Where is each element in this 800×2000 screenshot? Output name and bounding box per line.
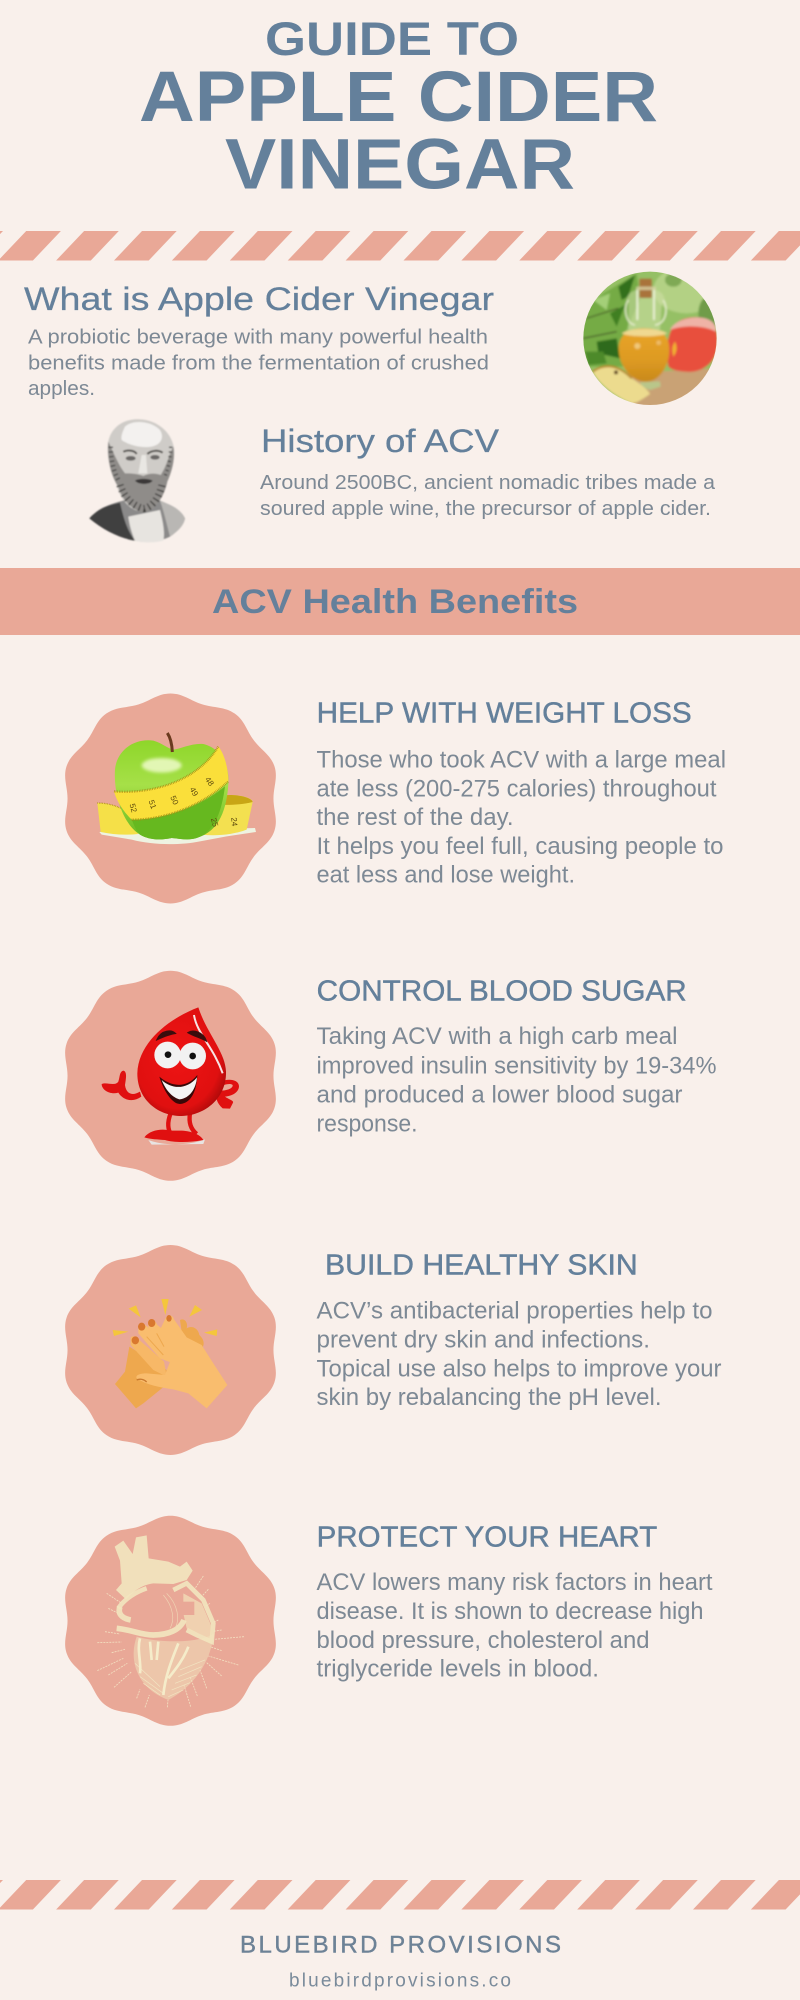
text block: healthy skin description: Topical use also helps to improve your	[316, 1355, 722, 1382]
text block: blood sugar description: and produced a lower blood sugar	[316, 1081, 683, 1108]
title: GUIDE TO	[265, 12, 519, 65]
badge: blood sugar	[65, 971, 276, 1181]
text block: history description: Around 2500BC, ancient nomadic tribes made a	[260, 472, 716, 494]
text block: history description: soured apple wine, the precursor of apple cider.	[260, 498, 711, 520]
text block: healthy skin description: prevent dry skin and infections.	[316, 1326, 650, 1353]
icon: green apple with measuring tape: 50	[168, 794, 180, 807]
text block: heart description	[316, 1569, 713, 1683]
text block: blood sugar description	[316, 1023, 716, 1137]
banner: ACV health benefits: ACV Health Benefits	[212, 583, 578, 621]
icon: green apple with measuring tape: 51	[147, 799, 158, 811]
panel: history of ACV	[260, 423, 716, 520]
text block: what is ACV description	[28, 326, 489, 400]
heading: history of ACV: History of ACV	[261, 423, 500, 459]
text block: heart description: ACV lowers many risk factors in heart	[316, 1569, 713, 1596]
icon: green apple with measuring tape: 48	[203, 775, 216, 788]
icon: green apple with measuring tape: 52	[128, 803, 139, 814]
panel: build healthy skin	[65, 1245, 722, 1455]
icon: green apple with measuring tape: 24	[229, 817, 239, 827]
panel: help with weight loss	[65, 694, 726, 904]
text block: heart description: blood pressure, cholesterol and	[316, 1627, 650, 1654]
icon: smiling blood drop character	[102, 1007, 239, 1145]
text block: blood sugar description: response.	[316, 1110, 418, 1137]
heading: what is ACV: What is Apple Cider Vinegar	[24, 281, 494, 317]
icon: green apple with measuring tape: 49	[188, 786, 200, 798]
heading: control blood sugar: CONTROL BLOOD SUGAR	[317, 976, 687, 1008]
text block: healthy skin description: skin by rebalancing the pH level.	[316, 1384, 662, 1411]
text block: what is ACV description: A probiotic beverage with many powerful health	[28, 326, 488, 348]
text block: healthy skin description: ACV’s antibacterial properties help to	[316, 1297, 712, 1324]
title: VINEGAR	[225, 126, 575, 204]
text block: history description	[260, 472, 716, 520]
text block: healthy skin description	[316, 1297, 722, 1411]
icon: clapping hands	[113, 1299, 227, 1408]
icon: green apple with measuring tape: 25	[209, 817, 220, 828]
panel: what is apple cider vinegar	[24, 281, 494, 400]
text block: weight loss description: It helps you feel full, causing people to	[316, 833, 724, 860]
footer: brand name and website: bluebirdprovisions.co	[289, 1971, 511, 1992]
text block: what is ACV description: benefits made from the fermentation of crushed	[28, 352, 489, 374]
badge: healthy skin	[65, 1245, 276, 1455]
footer: brand name and website	[240, 1932, 561, 1992]
text block: blood sugar description: Taking ACV with a high carb meal	[316, 1023, 678, 1050]
badge: heart	[65, 1516, 276, 1726]
panel: protect your heart	[65, 1516, 713, 1726]
panel: control blood sugar	[65, 971, 717, 1181]
badge: weight loss	[65, 694, 276, 904]
title: APPLE CIDER	[139, 58, 658, 137]
icon: engraved anatomical heart	[97, 1535, 244, 1707]
heading: build healthy skin: BUILD HEALTHY SKIN	[325, 1249, 638, 1281]
text block: weight loss description: the rest of the day.	[316, 804, 514, 831]
heading: help with weight loss: HELP WITH WEIGHT LOSS	[317, 698, 692, 730]
text block: heart description: disease. It is shown to decrease high	[316, 1598, 704, 1625]
text block: weight loss description: eat less and lose weight.	[316, 862, 575, 889]
text block: weight loss description: Those who took ACV with a large meal	[316, 746, 726, 773]
text block: weight loss description: ate less (200-275 calories) throughout	[316, 775, 717, 802]
text block: what is ACV description: apples.	[28, 378, 95, 400]
title	[139, 12, 658, 204]
image: Hippocrates bust engraving	[89, 419, 185, 542]
striped divider: bottom	[0, 1880, 800, 1910]
striped divider: top	[0, 231, 800, 260]
footer: brand name and website: BLUEBIRD PROVISIONS	[240, 1932, 561, 1959]
heading: protect your heart: PROTECT YOUR HEART	[317, 1522, 658, 1554]
text block: heart description: triglyceride levels in blood.	[316, 1656, 599, 1683]
icon: green apple with measuring tape	[97, 733, 256, 844]
text block: weight loss description	[316, 746, 726, 889]
banner: ACV health benefits	[0, 568, 800, 635]
text block: blood sugar description: improved insulin sensitivity by 19-34%	[316, 1052, 716, 1079]
image: vinegar jug and apple photo	[583, 272, 717, 405]
